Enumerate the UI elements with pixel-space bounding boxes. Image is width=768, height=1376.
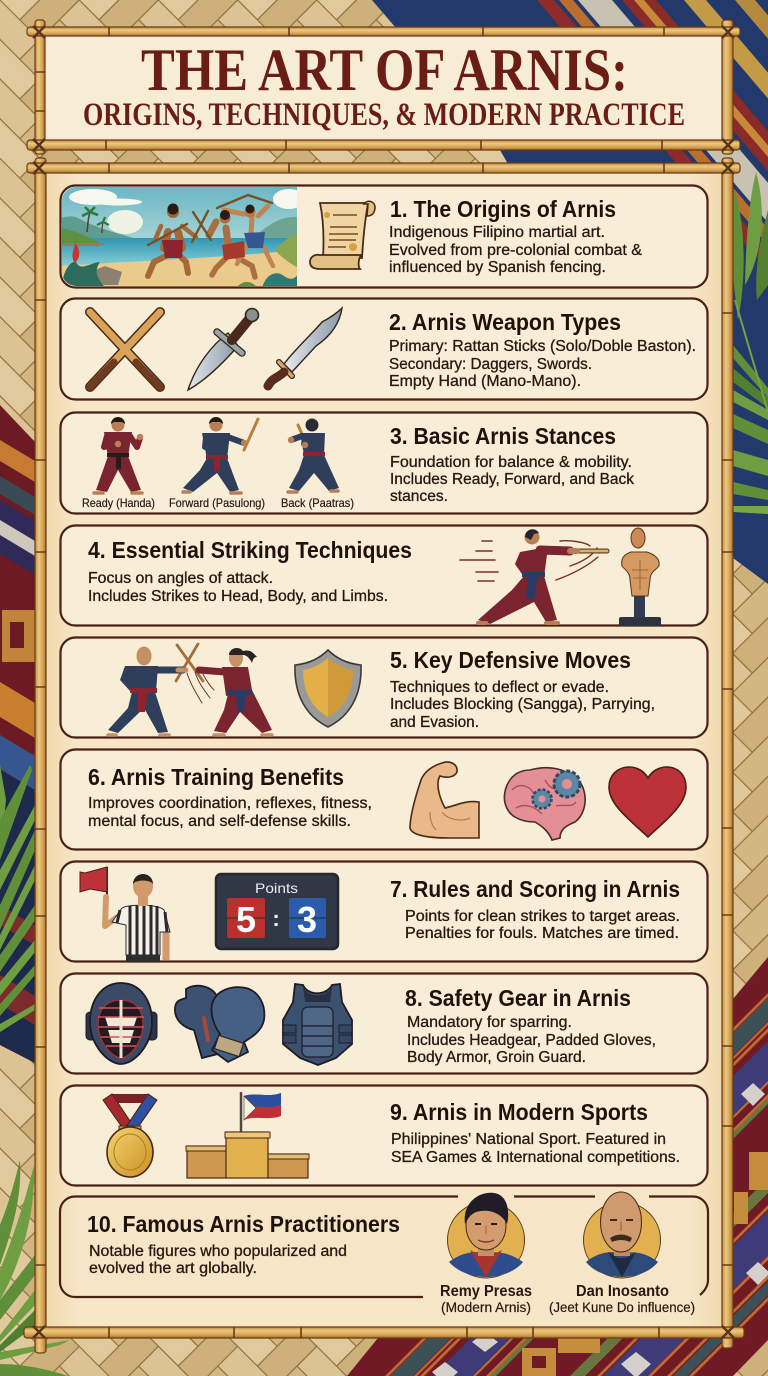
caption: Remy Presas <box>440 1283 532 1315</box>
score label: Points <box>255 880 298 896</box>
body 5: Techniques to deflect or evade. <box>390 679 609 696</box>
icon: flexed arm <box>410 762 479 838</box>
body 7: Points for clean strikes to target areas. <box>405 908 680 925</box>
scoreboard: 3 <box>297 899 317 940</box>
panel 3: stances <box>60 412 708 514</box>
body 1: influenced by Spanish fencing. <box>389 259 606 276</box>
body 3: stances. <box>390 488 448 505</box>
body 1: Indigenous Filipino martial art. <box>389 224 605 241</box>
label: ready: Ready (Handa) <box>82 496 155 510</box>
palm frond: right <box>732 172 768 514</box>
body 7 <box>405 908 680 942</box>
body 2: Primary: Rattan Sticks (Solo/Doble Baston). <box>389 338 696 355</box>
textile motifs <box>432 1083 768 1376</box>
icon: dagger <box>188 308 258 390</box>
title <box>83 37 685 133</box>
body 9: SEA Games & International competitions. <box>391 1149 680 1166</box>
body 2: Secondary: Daggers, Swords. <box>389 356 592 373</box>
background: red textile bottom right <box>340 950 768 1376</box>
icon: heart <box>609 767 686 837</box>
panel: main parchment <box>44 170 724 1330</box>
label: forward: Forward (Pasulong) <box>169 496 265 510</box>
panel 2: weapons <box>60 298 708 400</box>
icon: medal <box>103 1094 157 1177</box>
caption: Remy Presas: Remy Presas <box>440 1283 532 1300</box>
body 1: Evolved from pre-colonial combat & <box>389 242 643 259</box>
body 4 <box>88 570 388 605</box>
panel 9: modern sports <box>60 1086 708 1186</box>
scoreboard <box>216 874 338 949</box>
body 4: Focus on angles of attack. <box>88 570 273 587</box>
scoreboard: 5 <box>236 899 256 940</box>
body 3: Includes Ready, Forward, and Back <box>390 471 634 488</box>
icon: padded gloves <box>175 986 264 1062</box>
heading 2: 2. Arnis Weapon Types <box>389 309 621 335</box>
icon: body armor <box>283 984 352 1065</box>
panel 1: origins <box>60 186 708 288</box>
beach illustration <box>60 186 305 288</box>
body 10 <box>89 1243 347 1277</box>
heading 8: 8. Safety Gear in Arnis <box>405 985 631 1011</box>
heading 4: 4. Essential Striking Techniques <box>88 537 412 563</box>
body 2: Empty Hand (Mano-Mano). <box>389 373 581 390</box>
heading 9: 9. Arnis in Modern Sports <box>390 1099 648 1125</box>
background: navy textile top right <box>372 0 768 600</box>
body 7: Penalties for fouls. Matches are timed. <box>405 925 679 942</box>
body 1 <box>389 224 643 276</box>
palm frond: bottom left <box>0 1160 70 1376</box>
background: red textile left <box>0 400 35 1070</box>
palm frond: left <box>0 765 35 1032</box>
body 10: Notable figures who popularized and <box>89 1243 347 1260</box>
body 5: and Evasion. <box>390 714 479 731</box>
body 10: evolved the art globally. <box>89 1260 257 1277</box>
icon: sword <box>268 308 342 386</box>
panel 8: safety <box>60 974 708 1074</box>
heading 3: 3. Basic Arnis Stances <box>390 423 616 449</box>
body 5: Includes Blocking (Sangga), Parrying, <box>390 696 655 713</box>
scroll icon <box>310 201 375 269</box>
icon: brain with gears <box>504 768 585 840</box>
figure: striker <box>460 529 607 624</box>
figure: back stance <box>288 418 339 492</box>
heading 10: 10. Famous Arnis Practitioners <box>87 1211 400 1237</box>
caption: Remy Presas: (Modern Arnis) <box>441 1299 531 1315</box>
caption: Dan Inosanto <box>549 1283 695 1315</box>
body 8: Includes Headgear, Padded Gloves, <box>407 1032 656 1049</box>
body 8: Body Armor, Groin Guard. <box>407 1049 586 1066</box>
panel: title parchment <box>44 33 724 143</box>
label: back: Back (Paatras) <box>281 496 354 510</box>
body 3 <box>390 454 634 505</box>
body 4: Includes Strikes to Head, Body, and Limbs. <box>88 588 388 605</box>
icon: podium with flag <box>186 1092 309 1178</box>
body 2 <box>389 338 696 390</box>
body 8: Mandatory for sparring. <box>407 1014 572 1031</box>
figure: ready stance <box>94 417 143 493</box>
panel 4: strikes <box>60 526 708 626</box>
heading 5: 5. Key Defensive Moves <box>390 647 631 673</box>
body 6 <box>88 795 372 830</box>
body 9: Philippines' National Sport. Featured in <box>391 1131 666 1148</box>
body 6: Improves coordination, reflexes, fitness, <box>88 795 372 812</box>
heading 6: 6. Arnis Training Benefits <box>88 764 344 790</box>
icon: training dummy <box>619 528 661 626</box>
panel 5: defense <box>60 638 708 738</box>
body 6: mental focus, and self-defense skills. <box>88 813 351 830</box>
title: THE ART OF ARNIS: <box>141 37 628 103</box>
body 8 <box>407 1014 656 1066</box>
body 3: Foundation for balance & mobility. <box>390 454 632 471</box>
portrait: Remy Presas <box>448 1193 524 1278</box>
portrait: Dan Inosanto <box>584 1192 660 1278</box>
heading 1: 1. The Origins of Arnis <box>390 196 616 222</box>
icon: shield <box>295 650 361 727</box>
figure: referee with flag <box>80 867 170 962</box>
panel 10: practitioners <box>60 1192 708 1315</box>
body 5 <box>390 679 655 731</box>
panel 6: benefits <box>60 750 708 850</box>
figure: forward stance <box>183 417 258 493</box>
panel 7: rules <box>60 862 708 962</box>
icon: headgear <box>86 983 157 1064</box>
panel outline with gaps <box>60 1196 708 1297</box>
caption: Dan Inosanto: (Jeet Kune Do influence) <box>549 1299 695 1315</box>
caption: Dan Inosanto: Dan Inosanto <box>576 1283 669 1300</box>
scoreboard: : <box>272 906 280 931</box>
figure: two fighters blocking <box>108 644 272 735</box>
body 9 <box>391 1131 680 1166</box>
icon: crossed rattan sticks <box>90 312 160 387</box>
heading 7: 7. Rules and Scoring in Arnis <box>390 876 680 902</box>
